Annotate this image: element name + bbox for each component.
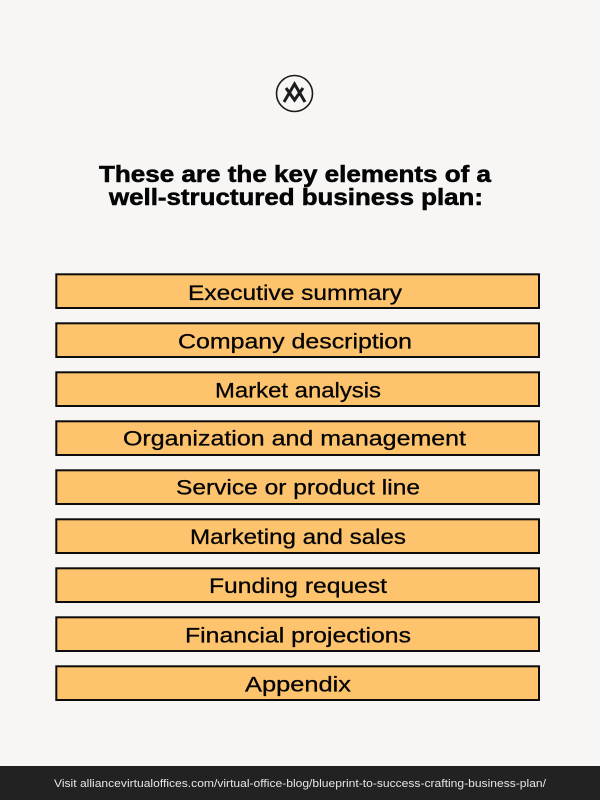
item: marketing and sales: Marketing and sales <box>190 525 406 549</box>
item: funding request <box>56 568 539 602</box>
item: executive summary <box>56 274 539 308</box>
list: business plan elements <box>56 274 539 700</box>
item: company description <box>56 323 539 357</box>
title: well-structured business plan: <box>108 184 483 210</box>
item: organization and management <box>56 421 539 455</box>
title <box>99 161 491 210</box>
item: executive summary: Executive summary <box>188 281 402 305</box>
footer bar <box>0 766 600 800</box>
item: financial projections <box>56 617 539 651</box>
item: service or product line: Service or product line <box>176 476 420 500</box>
footer bar: Visit alliancevirtualoffices.com/virtual-office-blog/blueprint-to-success-crafting-business-plan/ <box>54 778 547 790</box>
item: company description: Company description <box>178 330 412 354</box>
icon: logo <box>276 76 312 112</box>
item: organization and management: Organization and management <box>123 426 466 450</box>
item: marketing and sales <box>56 519 539 553</box>
item: market analysis: Market analysis <box>215 378 381 402</box>
item: service or product line <box>56 470 539 504</box>
item: funding request: Funding request <box>209 574 387 598</box>
item: appendix: Appendix <box>245 673 351 697</box>
item: appendix <box>56 666 539 700</box>
item: financial projections: Financial projections <box>185 624 411 648</box>
item: market analysis <box>56 372 539 406</box>
title: These are the key elements of a <box>99 161 491 187</box>
